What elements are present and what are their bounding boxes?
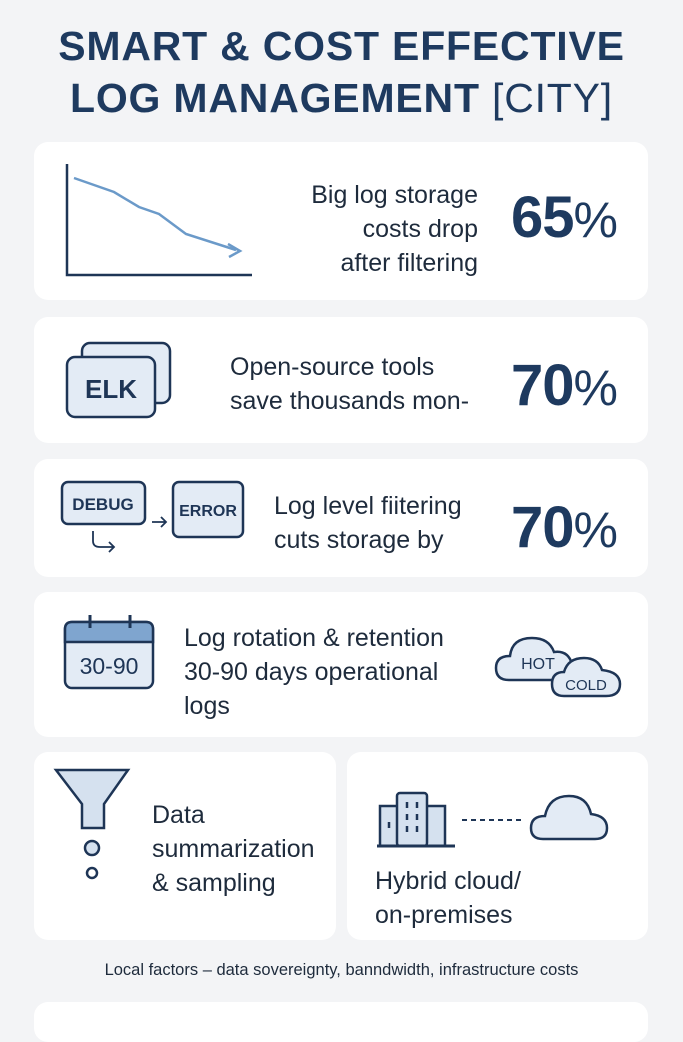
text: 30-90 days operational [184,658,438,686]
icon: ELK [66,342,172,418]
panel: hybrid cloud [347,752,648,940]
text: save thousands mon- [230,387,469,415]
stat: 70% [511,353,618,418]
chart: declining line [66,164,252,276]
title: SMART & COST EFFECTIVE [58,23,625,69]
icon: hot/cold clouds: COLD [565,677,607,694]
icon: debug to error: ERROR [179,503,237,520]
text [152,801,315,897]
text: Data [152,801,205,829]
text: Log rotation & retention [184,624,444,652]
bottom card [34,1002,648,1042]
text [274,492,462,554]
text: costs drop [363,215,478,243]
panel: rotation & retention [34,592,648,737]
text [184,624,444,720]
icon: calendar 30-90: 30-90 [80,653,138,679]
title: LOG MANAGEMENT [CITY] [70,75,613,121]
text: on-premises [375,901,513,929]
icon: debug to error: DEBUG [72,495,134,514]
text [230,353,469,415]
panel: open-source tools [34,317,648,443]
icon: hot/cold clouds [494,636,622,698]
panel: summarization [34,752,336,940]
title [58,23,625,121]
text: Open-source tools [230,353,434,381]
text: summarization [152,835,315,863]
stat: 70% [511,495,618,560]
footer note: Local factors – data sovereignty, banndwidth, infrastructure costs [105,961,578,979]
icon: ELK: ELK [85,374,137,404]
text [311,181,478,277]
text [375,867,521,929]
text: logs [184,692,230,720]
text: & sampling [152,869,276,897]
icon: funnel [54,768,130,880]
icon: hot/cold clouds: HOT [521,656,555,673]
text: cuts storage by [274,526,444,554]
icon: building to cloud [377,792,608,848]
panel: log level filtering [34,459,648,577]
text: after filtering [340,249,478,277]
panel: storage costs [34,142,648,300]
text: Log level fiitering [274,492,462,520]
text: Big log storage [311,181,478,209]
text: Hybrid cloud/ [375,867,521,895]
icon: debug to error [60,480,244,553]
stat: 65% [511,185,618,250]
icon: calendar 30-90 [64,615,154,690]
